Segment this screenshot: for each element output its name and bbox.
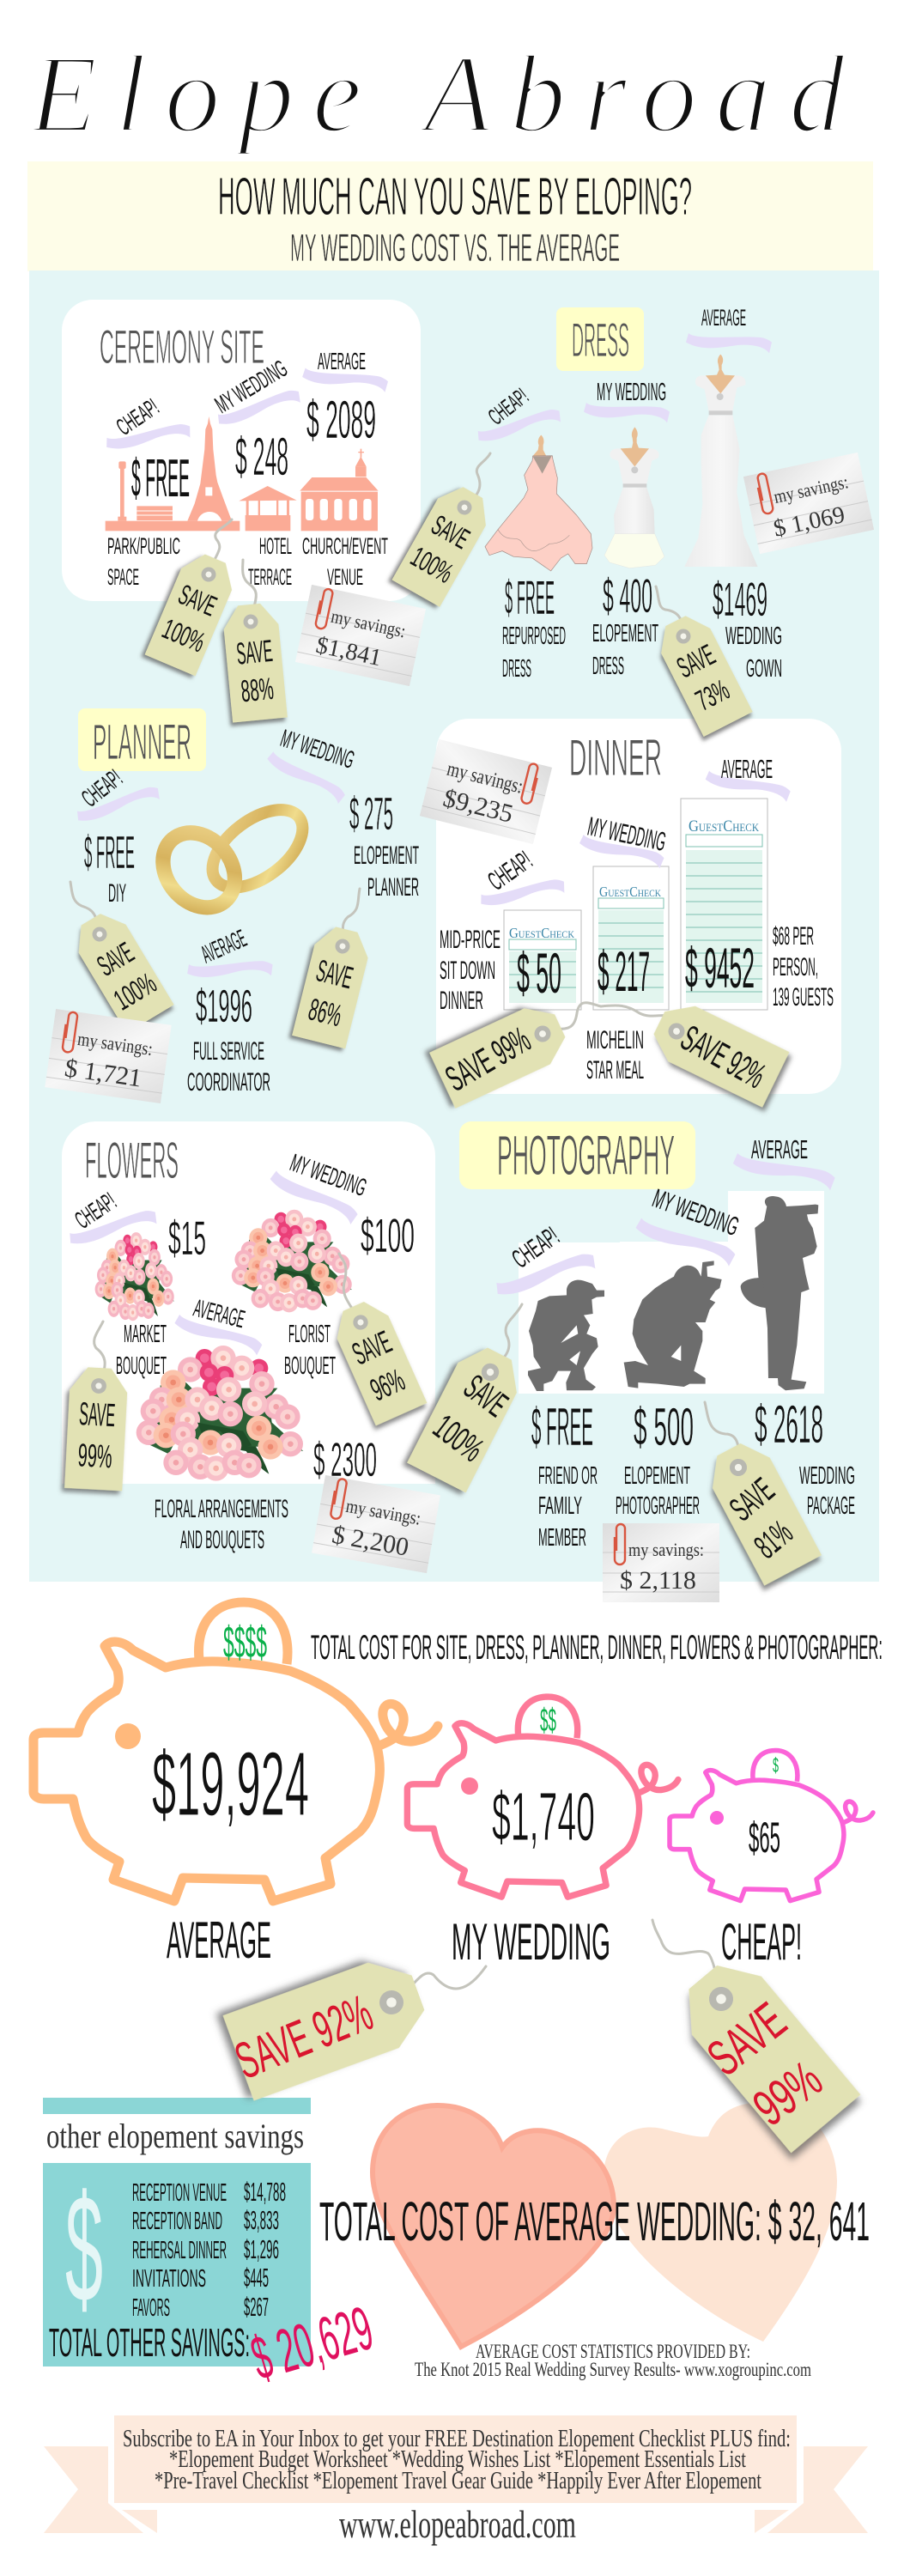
panel: dress: WEDDING <box>725 623 782 650</box>
tag: save 73%: 73% <box>691 674 735 718</box>
text: park: SPACE <box>107 564 139 590</box>
panel: flowers: BOUQUET <box>284 1352 336 1380</box>
label: cheap <box>67 1188 159 1254</box>
text: hotel <box>248 533 292 590</box>
panel: planner: FULL SERVICE <box>193 1037 264 1066</box>
silhouette: cheap photographer <box>528 1280 604 1391</box>
text: per person: PERSON, <box>773 953 818 981</box>
panel: dinner: MICHELIN <box>586 1026 644 1054</box>
label: my wedding: MY WEDDING <box>287 1150 370 1202</box>
note: my savings: $ 2,200 <box>330 1521 411 1562</box>
price tag strings <box>543 1003 676 1034</box>
price: full service: $1996 <box>196 981 252 1032</box>
panel: flowers: $15 <box>168 1211 206 1265</box>
subscribe text <box>123 2425 791 2494</box>
panel: other elopement savings <box>43 2098 380 2393</box>
tag: save 88%: 88% <box>240 671 275 708</box>
string <box>209 519 232 574</box>
note: my savings <box>312 1475 440 1573</box>
price: full service <box>187 981 270 1097</box>
label: cheap: CHEAP! <box>507 1221 565 1274</box>
label: average <box>686 305 772 353</box>
panel: ceremony site <box>62 300 426 723</box>
tag: save 99% red <box>668 1948 860 2153</box>
silhouette: average photographer <box>741 1196 818 1390</box>
note: my savings: $9,235 <box>440 784 516 829</box>
hearts <box>373 2102 837 2347</box>
piggy bank: average: $19,924 <box>152 1734 309 1835</box>
panel: dinner: STAR MEAL <box>586 1056 644 1084</box>
text: wedding gown <box>725 623 782 683</box>
panel: dinner: $ 50 <box>517 941 561 1005</box>
savings list: FAVORS <box>132 2294 170 2322</box>
label: average: AVERAGE <box>191 1295 247 1334</box>
tag: save 99% <box>64 1366 129 1491</box>
label: my wedding <box>584 379 670 422</box>
tag: save 99%: SAVE 99% <box>439 1019 537 1099</box>
text: mid-price dinner: DINNER <box>440 987 483 1015</box>
panel: flowers: FLORAL ARRANGEMENTS <box>155 1495 288 1523</box>
label: cheap <box>479 845 567 914</box>
note: my savings: my savings: <box>772 471 850 507</box>
savings list: $267 <box>244 2292 269 2322</box>
panel: flowers: MARKET <box>124 1321 167 1348</box>
string <box>490 1304 522 1372</box>
panel: dinner: $ 9452 <box>685 936 755 999</box>
bouquet: market <box>95 1232 174 1321</box>
note: my savings: my savings: <box>76 1028 154 1060</box>
price: free <box>84 827 135 908</box>
string <box>656 586 683 636</box>
savings list: RECEPTION BAND <box>132 2208 222 2235</box>
panel: photography: ELOPEMENT <box>624 1462 690 1490</box>
header band <box>27 161 873 271</box>
label: average: AVERAGE <box>751 1134 808 1164</box>
panel: dinner: $ 217 <box>598 939 650 1003</box>
tag: save 73% <box>651 609 753 737</box>
tag: save 99%: 99% <box>77 1437 113 1475</box>
label: cheap <box>476 383 563 451</box>
tag: save 92%: SAVE 92% <box>675 1018 772 1096</box>
note: my savings <box>45 1009 172 1103</box>
guest check: cheap: GuestCheck <box>509 925 574 941</box>
label: average: AVERAGE <box>318 348 366 374</box>
panel: ceremony site: PARK/PUBLIC <box>107 533 180 559</box>
tag: save 86%: SAVE <box>313 952 356 995</box>
text: mid-price dinner <box>440 926 500 1015</box>
panel: dinner: SIT DOWN <box>440 957 495 985</box>
label: cheap: CHEAP! <box>77 765 128 813</box>
text: friend: FAMILY <box>538 1492 582 1520</box>
label: average <box>301 348 389 392</box>
label: my wedding <box>578 811 669 869</box>
savings list: RECEPTION VENUE <box>132 2179 227 2207</box>
teal comparison panel background <box>29 270 879 1582</box>
website url: www.elopeabroad.com <box>339 2502 576 2546</box>
piggy bank: my wedding: MY WEDDING <box>452 1913 610 1971</box>
panel: photography: $ FREE <box>531 1398 593 1457</box>
note: my savings: $ 1,069 <box>771 501 847 543</box>
label: average: AVERAGE <box>701 305 746 331</box>
label: my wedding <box>633 1183 743 1267</box>
panel: dress: $ 400 <box>603 568 652 623</box>
panel: planner: $ FREE <box>84 827 135 878</box>
guest check: my wedding <box>593 866 669 1010</box>
panel: flowers: $ 2300 <box>313 1432 377 1486</box>
label: cheap <box>105 393 192 458</box>
panel: planner: PLANNER <box>93 714 191 770</box>
note: my savings: my savings: <box>329 605 408 641</box>
bouquet: floral arrangements <box>136 1346 303 1481</box>
source credit: AVERAGE COST STATISTICS PROVIDED BY: <box>476 2341 750 2362</box>
tag: save 99% red: SAVE <box>697 1991 797 2087</box>
tag: save 81%: SAVE <box>723 1470 781 1528</box>
panel: ceremony site: CEREMONY SITE <box>100 319 264 374</box>
string <box>391 1966 486 2002</box>
note: my savings: $ 1,721 <box>63 1054 143 1092</box>
panel: planner: MY WEDDING <box>277 725 357 775</box>
panel: flowers <box>62 1121 440 1573</box>
text: floral arrangements <box>155 1495 288 1554</box>
guest check: my wedding: GuestCheck <box>599 884 661 900</box>
note: my savings <box>743 453 874 554</box>
note: my savings <box>603 1523 719 1602</box>
panel: dress: $1469 <box>713 572 767 626</box>
piggy bank: my wedding: $$ <box>540 1703 556 1739</box>
text: repurposed dress: DRESS <box>502 655 531 683</box>
piggy bank: cheap: $ <box>773 1754 779 1777</box>
piggy bank: average <box>33 1602 438 1969</box>
panel: other elopement savings: $ <box>65 2163 103 2334</box>
guest check: average: GuestCheck <box>689 817 760 835</box>
note: my savings <box>420 739 552 844</box>
price: free: DIY <box>108 879 126 908</box>
label: average: AVERAGE <box>721 754 773 784</box>
label: cheap: CHEAP! <box>70 1188 121 1235</box>
text: florist bouquet <box>284 1321 336 1380</box>
heading: dress <box>556 307 644 371</box>
tag: save 92% red: SAVE 92% <box>228 1984 380 2090</box>
savings list: $3,833 <box>244 2205 279 2235</box>
piggy bank: cheap <box>670 1751 873 1971</box>
tag: save 100%: 100% <box>426 1406 491 1469</box>
tag: save 88%: SAVE <box>235 633 274 671</box>
source credit <box>415 2341 811 2380</box>
tag: save 100%: SAVE <box>92 936 140 983</box>
tag: save 100%: SAVE <box>427 508 475 555</box>
panel: photography: PHOTOGRAPHER <box>616 1492 700 1520</box>
panel: flowers: FLOWERS <box>85 1132 179 1189</box>
tag: save 99% red: 99% <box>743 2050 832 2137</box>
label: average <box>731 1134 836 1191</box>
label: my wedding: MY WEDDING <box>649 1183 743 1242</box>
panel: flowers: FLORIST <box>288 1321 331 1348</box>
tag: save 100%: SAVE <box>174 578 221 623</box>
note: my savings: my savings: <box>445 758 525 799</box>
text: per person: $68 PER <box>773 922 814 951</box>
tag: save 81%: 81% <box>747 1513 800 1566</box>
tag: save 100%: 100% <box>158 612 209 659</box>
string <box>70 882 100 934</box>
panel: ceremony site: HOTEL <box>259 533 292 559</box>
icon: eiffel tower <box>187 416 232 521</box>
photo backdrops <box>519 1191 824 1394</box>
tag: save 86% <box>292 923 373 1048</box>
piggy bank: my wedding <box>407 1697 678 1971</box>
savings list: $445 <box>244 2263 269 2293</box>
tag: save 96%: 96% <box>365 1362 410 1407</box>
text: friend <box>538 1462 598 1552</box>
tag: save 96% <box>328 1295 428 1425</box>
heading: other elopement savings <box>46 2117 304 2155</box>
label: cheap: CHEAP! <box>483 383 533 430</box>
label: my wedding: MY WEDDING <box>210 355 292 418</box>
text: church <box>302 533 388 590</box>
label: average <box>172 1295 264 1356</box>
tag: save 73%: SAVE <box>672 638 720 684</box>
text: ELOPEMENT <box>354 841 419 870</box>
savings list: REHERSAL DINNER <box>132 2237 227 2264</box>
label: cheap: CHEAP! <box>482 845 537 896</box>
piggy bank: average: $$$$ <box>223 1618 267 1668</box>
panel: photography: FRIEND OR <box>538 1462 598 1490</box>
tag: save 86%: 86% <box>305 991 345 1033</box>
heading: planner <box>78 708 206 771</box>
savings list: $1,296 <box>244 2234 279 2264</box>
text: park <box>107 533 180 590</box>
label: average <box>186 925 274 985</box>
icon: park lamp and bench <box>106 461 240 531</box>
label: average: AVERAGE <box>197 925 251 969</box>
icon: church <box>300 449 379 531</box>
piggy bank: average: AVERAGE <box>167 1911 271 1969</box>
icon: wedding rings <box>149 794 316 922</box>
panel: ceremony site: $ 248 <box>235 428 288 487</box>
panel: flowers: BOUQUET <box>116 1352 167 1380</box>
label: average <box>704 754 792 802</box>
savings list: INVITATIONS <box>132 2265 206 2293</box>
panel: ceremony site: CHURCH/EVENT <box>302 533 388 559</box>
text: repurposed dress <box>502 623 566 683</box>
tag: save 100% <box>407 1339 529 1492</box>
text: market bouquet <box>116 1321 167 1380</box>
string <box>339 1254 361 1322</box>
note: my savings <box>295 585 426 686</box>
tag: save 100%: 100% <box>405 540 458 589</box>
panel: dress: $ FREE <box>505 570 555 624</box>
guest check: cheap <box>504 910 581 1010</box>
note: my savings: my savings: <box>344 1495 422 1529</box>
icon: gazebo <box>239 486 297 531</box>
piggy bank: cheap: $65 <box>749 1814 780 1862</box>
text: per person <box>773 922 834 1012</box>
string <box>705 1402 739 1467</box>
panel: dinner: MID-PRICE <box>440 926 500 954</box>
tag: save 92% <box>646 995 789 1108</box>
text: michelin star meal <box>586 1026 644 1084</box>
panel: dinner: MY WEDDING <box>585 811 669 857</box>
panel: planner <box>45 708 419 1103</box>
tag: save 100% <box>67 905 174 1033</box>
note: my savings: my savings: <box>628 1539 704 1560</box>
panel: dinner: DINNER <box>569 729 662 787</box>
panel: dress: MY WEDDING <box>597 379 666 406</box>
price: elopement planner: $ 275 <box>349 788 393 840</box>
panel: other elopement savings: $14,788 <box>244 2177 286 2207</box>
panel: ceremony site: TERRACE <box>248 564 292 590</box>
panel: dress: ELOPEMENT <box>592 620 658 647</box>
tag: save 99%: SAVE <box>78 1396 116 1434</box>
panel: ceremony site: $ FREE <box>131 449 190 508</box>
label: cheap <box>75 765 162 830</box>
panel: other elopement savings: TOTAL OTHER SAVINGS: <box>49 2320 250 2365</box>
label: my wedding <box>263 725 357 805</box>
note: my savings: $1,841 <box>313 632 384 671</box>
icon: my wedding dress <box>604 427 664 568</box>
panel: photography: $ 500 <box>634 1398 694 1457</box>
text: church: VENUE <box>327 564 363 590</box>
icon: cheap dress <box>485 435 592 571</box>
panel: planner: COORDINATOR <box>187 1068 270 1097</box>
text: elopement dress <box>592 620 658 680</box>
tag: save 88% <box>221 602 288 723</box>
label: cheap <box>494 1221 598 1306</box>
panel: photography <box>407 1121 855 1602</box>
price: elopement planner <box>349 788 419 902</box>
price: florist: $100 <box>361 1208 415 1262</box>
label: my wedding <box>210 355 303 434</box>
panel: dress: GOWN <box>746 655 782 683</box>
text: PLANNER <box>367 873 419 902</box>
silhouette: my wedding photographer <box>624 1261 722 1388</box>
bouquet: florist <box>232 1210 352 1312</box>
panel: dress <box>392 305 874 737</box>
panel: dinner <box>420 719 841 1109</box>
savings list <box>132 2177 286 2322</box>
tag: save 100%: 100% <box>108 967 162 1017</box>
tag: save 99% <box>429 998 573 1109</box>
string <box>243 560 256 622</box>
text: wedding package <box>799 1462 855 1520</box>
panel: dress: DRESS <box>572 313 629 367</box>
string <box>464 453 490 507</box>
tag: save 81% <box>701 1434 822 1586</box>
string <box>343 889 360 946</box>
label: my wedding <box>265 1150 370 1225</box>
panel: ceremony site: $ 2089 <box>306 391 376 450</box>
label: cheap: CHEAP! <box>112 393 163 440</box>
tag: save 100% <box>145 548 240 676</box>
footer ribbon <box>44 2415 868 2533</box>
heading: photography <box>459 1121 695 1189</box>
tag: save 100% <box>392 479 497 607</box>
text: floral arrangements: AND BOUQUETS <box>180 1526 264 1554</box>
tag: save 100%: SAVE <box>457 1367 515 1425</box>
title: Elope Abroad <box>27 33 846 156</box>
text: elopement photographer <box>616 1462 700 1520</box>
string <box>652 1920 721 1999</box>
text: friend: MEMBER <box>538 1524 586 1552</box>
piggy bank: my wedding: $1,740 <box>492 1778 595 1855</box>
text: elopement dress: DRESS <box>592 653 624 680</box>
tag: save 96%: SAVE <box>347 1324 397 1371</box>
amount: $ 20,629 <box>244 2293 380 2393</box>
piggy bank: cheap: CHEAP! <box>721 1913 802 1971</box>
icon: average gown <box>684 355 758 567</box>
guest check: average <box>681 799 767 1010</box>
panel: dress: REPURPOSED <box>502 623 566 650</box>
note: my savings: $ 2,118 <box>620 1566 696 1595</box>
string <box>94 1321 105 1386</box>
